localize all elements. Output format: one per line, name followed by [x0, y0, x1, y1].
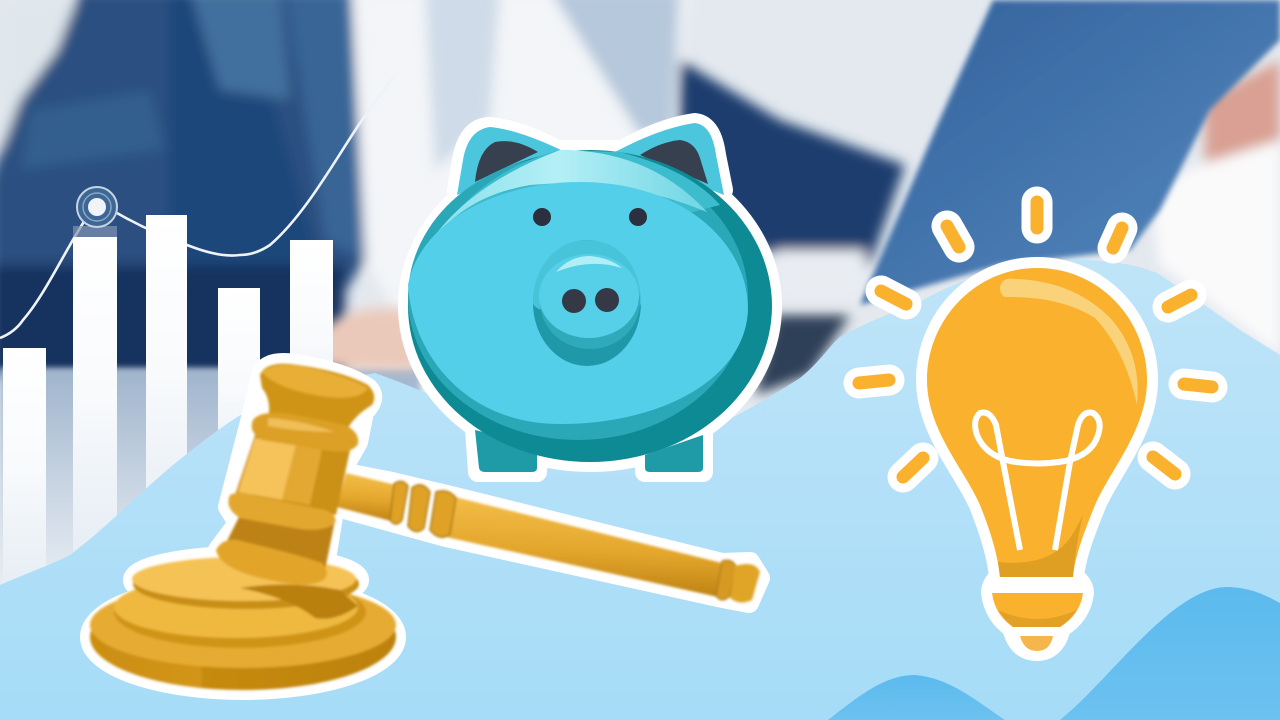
shirt [355, 0, 690, 320]
bulb outline [927, 268, 1147, 650]
pig ears [457, 127, 565, 195]
gavel white outline [90, 363, 760, 690]
light blue foreground wave [0, 260, 1280, 720]
suit [0, 0, 365, 375]
right hand [1205, 60, 1280, 170]
bulb filament [975, 412, 1100, 550]
pig snout [533, 240, 641, 366]
bulb neck shade [998, 515, 1083, 577]
bulb screw base [992, 593, 1083, 627]
icon: piggy bank [408, 123, 772, 472]
bulb highlight [1000, 279, 1138, 405]
right arm [680, 60, 905, 265]
bulb rays [859, 202, 1212, 477]
pig eyes [533, 208, 551, 226]
icon: light bulb [859, 202, 1212, 651]
gavel base [90, 584, 396, 690]
pig white outline [408, 123, 772, 472]
gavel head [260, 364, 374, 432]
gavel handle [337, 473, 400, 522]
pig face [408, 182, 748, 424]
icon: gavel [90, 363, 760, 690]
tablet [860, 0, 1280, 305]
darker blue bottom waves [828, 587, 1280, 720]
trend line [0, 75, 395, 338]
seated hand [305, 308, 420, 370]
bar chart with trend line [0, 75, 395, 588]
desk band [0, 368, 420, 588]
pig legs [475, 430, 537, 472]
pig body [408, 150, 772, 462]
laptop [775, 250, 865, 300]
bulb glass [927, 268, 1147, 577]
